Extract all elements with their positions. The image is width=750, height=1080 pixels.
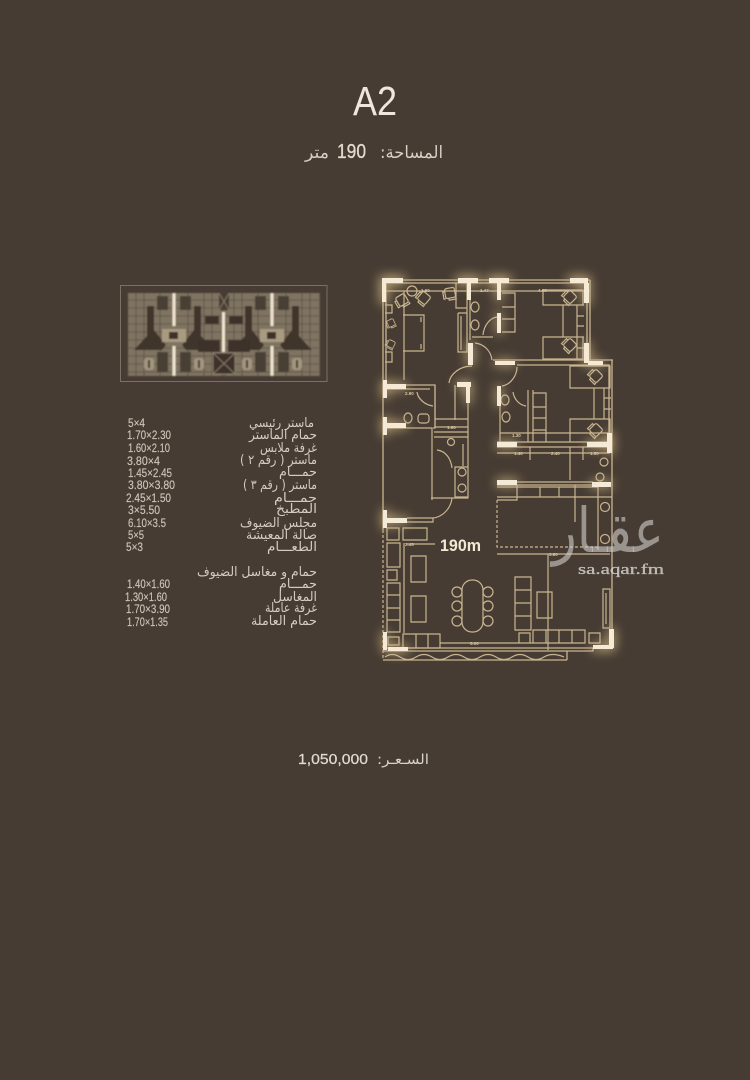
plan dimension labels: 2.40 <box>551 451 560 456</box>
price label: ‏السـعـر:‏ <box>377 752 429 768</box>
room sizes: 1.40×1.60 <box>127 577 170 591</box>
price value: 1,050,000 <box>298 752 368 768</box>
highlighted wall segments <box>382 278 614 651</box>
title: A2: A2 <box>353 78 397 124</box>
room sizes: 5×3 <box>126 540 143 554</box>
wardrobe right of bath <box>502 293 515 332</box>
master bathroom <box>470 300 493 340</box>
plan dimension labels: 2.45 <box>405 542 414 547</box>
area value: 190 <box>337 141 366 163</box>
room sizes: 6.10×3.5 <box>128 516 166 530</box>
bedroom two <box>543 290 584 359</box>
room names: حمـــام <box>274 491 317 506</box>
plan dimension labels: 1.60 <box>447 425 456 430</box>
room sizes: 1.70×3.90 <box>126 602 170 616</box>
room sizes: 3.80×3.80 <box>128 478 175 492</box>
apartment floor plan <box>380 276 615 660</box>
wall glow <box>380 276 615 653</box>
room names: المطبخ <box>276 502 317 517</box>
plan dimension labels: 4.00 <box>538 288 547 293</box>
price line <box>298 752 429 768</box>
room sizes: 2.45×1.50 <box>126 491 171 505</box>
room names: حمام و مغاسل الضيوف <box>197 565 317 580</box>
room names: حمام العاملة <box>251 614 317 629</box>
bedroom three <box>497 366 611 480</box>
room names: حمـــام <box>279 465 317 480</box>
room sizes: 5×5 <box>128 528 144 542</box>
outer walls <box>382 280 613 648</box>
room sizes: 1.70×1.35 <box>127 615 168 629</box>
watermark logo: عقـار <box>550 494 664 567</box>
plan linework <box>382 280 613 660</box>
master bedroom <box>385 283 590 428</box>
room names: غرفة عاملة <box>265 601 317 616</box>
room sizes: 1.30×1.60 <box>125 590 167 604</box>
plan dimension labels: 1.40 <box>514 451 523 456</box>
room names: مجلس الضيوف <box>240 516 317 531</box>
room names: حمـــام <box>279 577 317 592</box>
plan dimension labels <box>405 288 599 646</box>
plan dimension labels: 2.90 <box>405 391 414 396</box>
room dimensions table <box>125 416 317 629</box>
watermark <box>550 494 665 578</box>
area line <box>304 141 443 163</box>
room sizes: 1.60×2.10 <box>128 441 170 455</box>
room sizes: 1.70×2.30 <box>127 428 171 442</box>
room sizes: 1.45×2.45 <box>128 466 172 480</box>
plan dimension labels: 1.50 <box>590 451 599 456</box>
area unit: متر <box>304 143 329 163</box>
room sizes: 5×4 <box>128 416 145 430</box>
area label: ‏المساحة:‏ <box>380 143 443 163</box>
room sizes <box>125 416 175 629</box>
guest bath and maid rooms <box>387 385 468 522</box>
room names: المغاسل <box>273 590 317 605</box>
plan dimension labels: 5.00 <box>470 641 479 646</box>
room names <box>197 416 317 629</box>
area label 190m: 190m <box>440 537 481 555</box>
room names: صالة المعيشة <box>246 528 317 543</box>
living and dining <box>387 528 435 633</box>
room sizes: 3×5.50 <box>128 503 160 517</box>
room names: غرفة ملابس <box>260 441 317 456</box>
plan dimension labels: 1.47 <box>480 288 489 293</box>
watermark url: sa.aqar.fm <box>578 562 665 578</box>
plan dimension labels: 1.30 <box>512 433 521 438</box>
room names: ‏ماستر ( رقم ٣ )‏ <box>243 478 317 493</box>
room names: ماستر رئيسي <box>249 416 314 431</box>
kitchen <box>497 482 612 550</box>
building key plan <box>120 286 327 382</box>
room names: ‏ماستر ( رقم ٢ )‏ <box>240 453 317 468</box>
plan dimension labels: 3.80 <box>549 552 558 557</box>
room names: الطعـــام <box>267 540 317 555</box>
room names: حمام الماستر <box>248 428 317 443</box>
plan dimension labels: 1.60 <box>421 288 430 293</box>
room sizes: 3.80×4 <box>127 454 160 468</box>
